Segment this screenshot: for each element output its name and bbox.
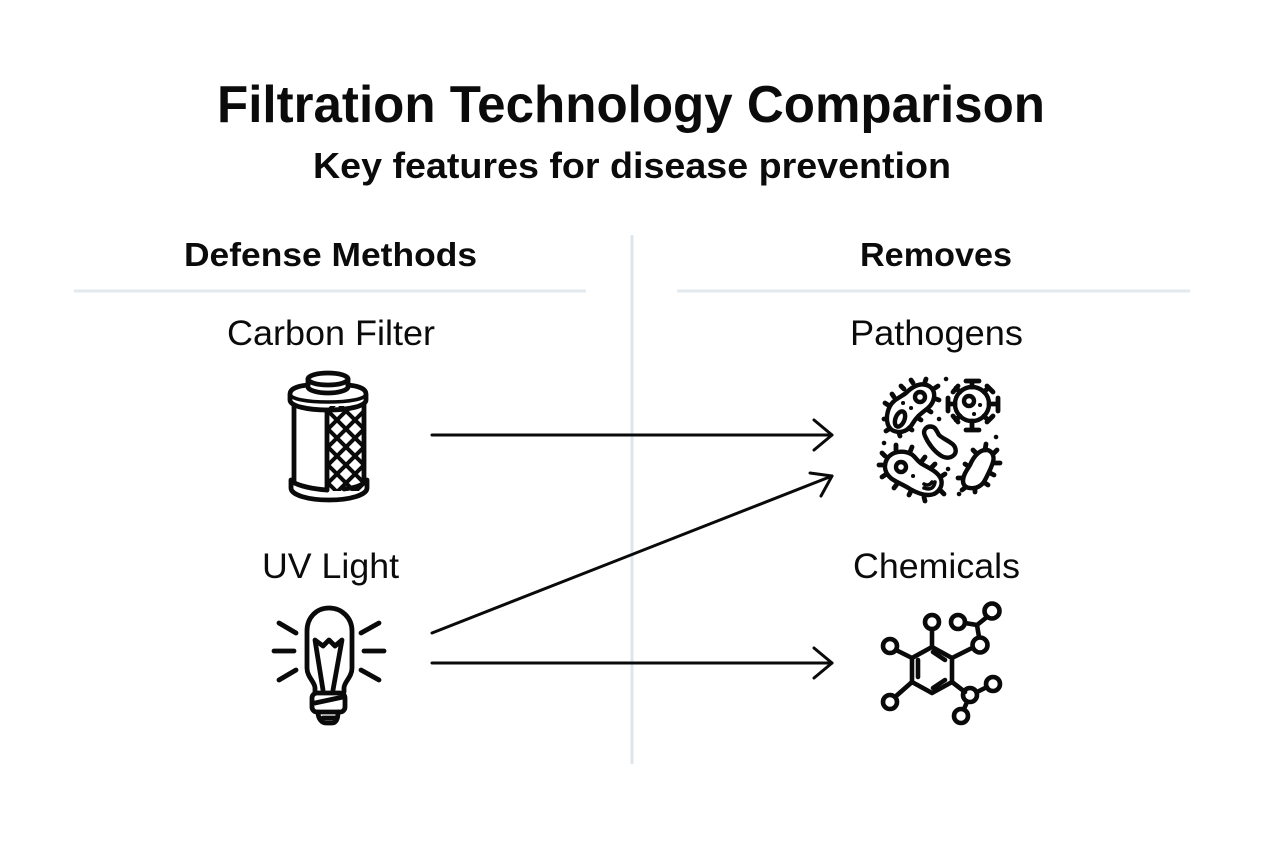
title: Filtration Technology Comparison <box>217 76 1045 134</box>
label: UV Light: UV Light <box>262 547 399 586</box>
icon: pathogens <box>879 379 1000 501</box>
label: Chemicals: Chemicals <box>853 547 1020 586</box>
bacterium lower right <box>958 444 1000 492</box>
arrow: UV Light to Pathogens <box>432 473 832 633</box>
bacterium lower left <box>879 445 945 501</box>
arrow: Carbon Filter to Pathogens <box>432 420 832 450</box>
bacterium upper left <box>884 379 939 436</box>
subtitle: Key features for disease prevention <box>313 145 951 186</box>
arrow: UV Light to Chemicals <box>432 648 832 678</box>
spores <box>884 379 996 494</box>
rod bacterium centre <box>924 427 956 458</box>
virus upper right <box>948 381 998 430</box>
heading: Defense Methods: Defense Methods <box>184 236 477 273</box>
heading: Removes: Removes <box>860 236 1012 273</box>
icon: chemical molecule <box>883 604 1000 723</box>
label: Pathogens: Pathogens <box>850 314 1023 353</box>
label: Carbon Filter: Carbon Filter <box>227 314 435 353</box>
icon: UV light bulb <box>274 608 384 723</box>
icon: carbon filter cartridge <box>290 373 367 520</box>
